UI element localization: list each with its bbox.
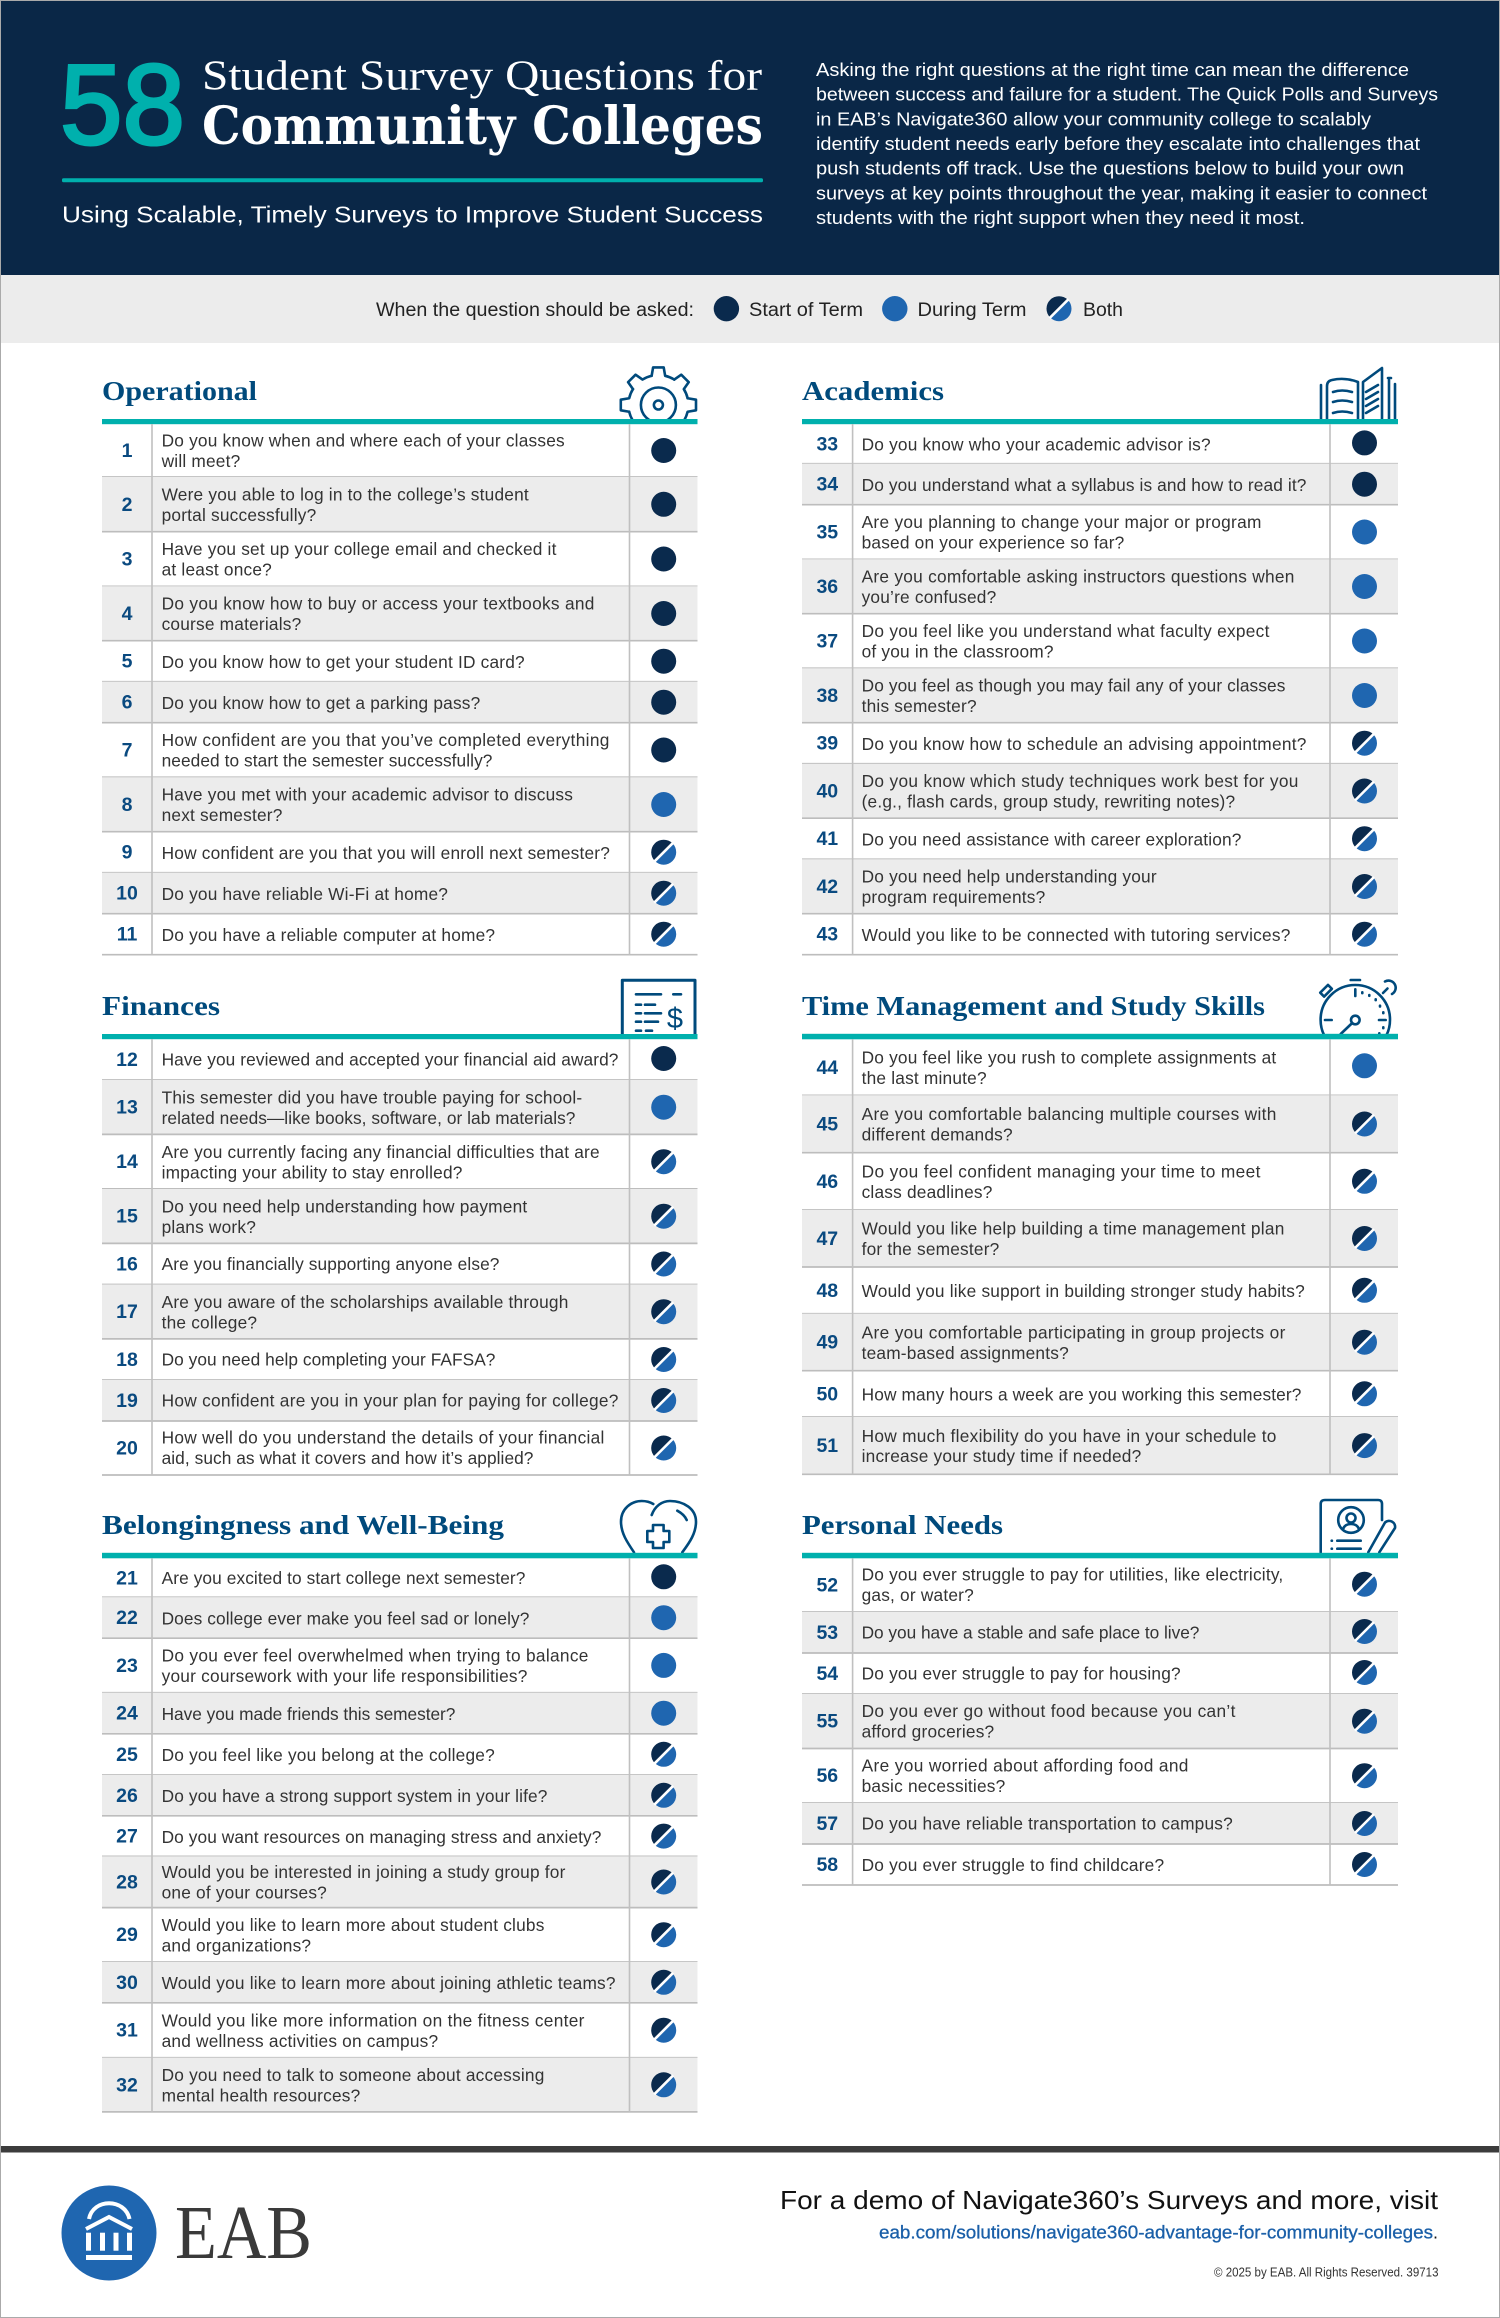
subtitle: Using Scalable, Timely Surveys to Improve Student Success [62, 202, 763, 228]
copyright: © 2025 by EAB. All Rights Reserved. 39713 [1214, 2265, 1438, 2280]
panel: personal needs [802, 1500, 1398, 1885]
row 18 [102, 1347, 698, 1380]
row 26: Do you have a strong support system in your life? [162, 1786, 548, 1806]
icon: open book [1321, 368, 1395, 419]
row 43: Would you like to be connected with tutoring services? [862, 925, 1291, 945]
row 7: How confident are you that you’ve completed everything [162, 730, 610, 750]
row 49: team-based assignments? [862, 1343, 1069, 1363]
row 47 [802, 1210, 1398, 1267]
row 40: (e.g., flash cards, group study, rewriting notes)? [862, 792, 1235, 812]
row 33: Do you know who your academic advisor is? [862, 435, 1211, 455]
row 3: at least once? [162, 560, 272, 580]
row 22: Does college ever make you feel sad or lonely? [162, 1608, 530, 1628]
row 50: 50 [816, 1383, 838, 1405]
intro paragraph: Asking the right questions at the right time can mean the difference [816, 59, 1409, 80]
row 35: based on your experience so far? [862, 533, 1125, 553]
legend band: When the question should be asked: [376, 300, 694, 321]
section rule [102, 1553, 698, 1558]
row 44: 44 [816, 1057, 838, 1079]
row 52: gas, or water? [862, 1585, 974, 1605]
row 42 [802, 859, 1398, 914]
legend band: During Term [918, 300, 1026, 321]
row 44 [802, 1048, 1398, 1095]
heading: personal needs: Personal Needs [802, 1510, 1003, 1540]
row 35: Are you planning to change your major or program [862, 512, 1262, 532]
row 43: 43 [816, 924, 838, 946]
row 54 [802, 1660, 1398, 1694]
row 23 [102, 1646, 698, 1693]
row 45: 45 [816, 1114, 838, 1136]
row 12: Have you reviewed and accepted your financial aid award? [162, 1050, 619, 1070]
panel: belongingness and well-being [102, 1501, 698, 2112]
row 5 [102, 649, 698, 682]
row 7 [102, 730, 698, 777]
row 33: 33 [816, 433, 838, 455]
row 21: 21 [116, 1567, 138, 1589]
heading: time management: Time Management and Study Skills [802, 991, 1265, 1021]
row 53: Do you have a stable and safe place to live? [862, 1622, 1200, 1642]
row 28: Would you be interested in joining a study group for [162, 1862, 566, 1882]
row 6: Do you know how to get a parking pass? [162, 693, 480, 713]
row 30: 30 [116, 1972, 138, 1994]
row 8: Have you met with your academic advisor to discuss [162, 785, 573, 805]
row 12 [102, 1046, 698, 1080]
panel: academics [802, 368, 1398, 955]
row 42: Do you need help understanding your [862, 867, 1157, 887]
row 28: one of your courses? [162, 1883, 327, 1903]
row 42: program requirements? [862, 887, 1045, 907]
row 14: 14 [116, 1151, 138, 1173]
row 46: class deadlines? [862, 1182, 993, 1202]
row 36: you’re confused? [862, 587, 996, 607]
row 3: Have you set up your college email and checked it [162, 539, 557, 559]
teal rule [62, 178, 763, 182]
row 32: mental health resources? [162, 2085, 360, 2105]
row 10: 10 [116, 883, 138, 905]
row 51: increase your study time if needed? [862, 1446, 1141, 1466]
big number 58: 58 [60, 42, 185, 169]
row 2 [102, 477, 698, 532]
row 9: How confident are you that you will enroll next semester? [162, 843, 610, 863]
row 18: 18 [116, 1349, 138, 1371]
row 45: Are you comfortable balancing multiple courses with [862, 1104, 1277, 1124]
row 55 [802, 1694, 1398, 1748]
intro paragraph: identify student needs early before they escalate into challenges that [816, 133, 1421, 154]
panel: time management [802, 980, 1398, 1474]
row 17: the college? [162, 1312, 257, 1332]
row 13: 13 [116, 1097, 138, 1119]
intro paragraph: surveys at key points throughout the year, making it easier to connect [816, 182, 1428, 203]
row 18: Do you need help completing your FAFSA? [162, 1350, 496, 1370]
footer: . [1433, 2222, 1438, 2242]
row 8: next semester? [162, 805, 283, 825]
legend band: Start of Term [749, 300, 863, 321]
row 29: 29 [116, 1924, 138, 1946]
row 15: 15 [116, 1206, 138, 1228]
row 57 [802, 1803, 1398, 1844]
row 21: Are you excited to start college next semester? [162, 1568, 526, 1588]
row 32: 32 [116, 2074, 138, 2096]
row 26: 26 [116, 1785, 138, 1807]
row 25: Do you feel like you belong at the college? [162, 1745, 495, 1765]
icon: stopwatch [1318, 978, 1397, 1034]
row 4: course materials? [162, 614, 301, 634]
row 46: Do you feel confident managing your time to meet [862, 1162, 1261, 1182]
row 29: Would you like to learn more about student clubs [162, 1915, 545, 1935]
row 1: Do you know when and where each of your classes [162, 431, 565, 451]
row 24: 24 [116, 1703, 138, 1725]
heading: belongingness: Belongingness and Well-Being [102, 1510, 505, 1540]
row 6 [102, 682, 698, 723]
row 40: 40 [816, 780, 838, 802]
row 32 [102, 2058, 698, 2112]
row 23: Do you ever feel overwhelmed when trying to balance [162, 1646, 589, 1666]
row 14: impacting your ability to stay enrolled? [162, 1162, 463, 1182]
intro paragraph [816, 59, 1438, 228]
row 34: Do you understand what a syllabus is and how to read it? [862, 475, 1307, 495]
row 26 [102, 1775, 698, 1816]
row 50: How many hours a week are you working this semester? [862, 1385, 1302, 1405]
row 56: 56 [816, 1765, 838, 1787]
row 5: 5 [122, 651, 133, 673]
row 20: How well do you understand the details of your financial [162, 1428, 605, 1448]
row 51: How much flexibility do you have in your schedule to [862, 1426, 1277, 1446]
row 6: 6 [122, 692, 133, 714]
row 10: Do you have reliable Wi-Fi at home? [162, 884, 448, 904]
row 9: 9 [122, 842, 133, 864]
row 32: Do you need to talk to someone about accessing [162, 2065, 545, 2085]
row 11 [102, 922, 698, 955]
row 7: needed to start the semester successfully? [162, 751, 493, 771]
row 42: 42 [816, 876, 838, 898]
row 51: 51 [816, 1435, 838, 1457]
row 20: 20 [116, 1438, 138, 1460]
row 22 [102, 1597, 698, 1638]
row 52: Do you ever struggle to pay for utilities, like electricity, [862, 1565, 1283, 1585]
row 1 [102, 431, 698, 477]
row 31: Would you like more information on the fitness center [162, 2010, 585, 2030]
row 34 [802, 464, 1398, 505]
row 14: Are you currently facing any financial difficulties that are [162, 1142, 600, 1162]
icon: financial document: $ [667, 1003, 683, 1035]
row 25: 25 [116, 1744, 138, 1766]
row 7: 7 [122, 740, 132, 762]
title line one: Student Survey Questions for [202, 54, 762, 100]
icon: profile document and pencil [1321, 1500, 1395, 1552]
row 58: 58 [816, 1854, 838, 1876]
row 29 [102, 1915, 698, 1962]
heading: academics: Academics [802, 376, 944, 406]
row 55: Do you ever go without food because you can’t [862, 1701, 1236, 1721]
row 37: of you in the classroom? [862, 642, 1054, 662]
row 30: Would you like to learn more about joining athletic teams? [162, 1973, 616, 1993]
row 16 [102, 1251, 698, 1284]
panel: finances [102, 980, 698, 1475]
row 1: will meet? [161, 451, 240, 471]
row 24: Have you made friends this semester? [162, 1704, 456, 1724]
row 49: 49 [816, 1332, 838, 1354]
row 17 [102, 1284, 698, 1339]
legend band [0, 275, 1500, 343]
row 1: 1 [122, 440, 133, 462]
row 19: How confident are you in your plan for paying for college? [162, 1390, 619, 1410]
url: eab.com/solutions/navigate360-advantage-for-community-colleges [879, 2222, 1433, 2242]
row 13 [102, 1080, 698, 1134]
section rule [802, 1034, 1398, 1039]
row 11: Do you have a reliable computer at home? [162, 925, 495, 945]
row 23: your coursework with your life responsibilities? [162, 1666, 528, 1686]
row 53 [802, 1612, 1398, 1653]
row 4: Do you know how to buy or access your textbooks and [162, 594, 595, 614]
row 23: 23 [116, 1655, 138, 1677]
section rule [802, 1553, 1398, 1558]
icon: EAB logo [62, 2186, 156, 2280]
row 52 [802, 1565, 1398, 1612]
intro paragraph: between success and failure for a student. The Quick Polls and Surveys [816, 84, 1438, 105]
heading: operational: Operational [102, 376, 258, 406]
row 51 [802, 1417, 1398, 1474]
row 13: This semester did you have trouble paying for school- [162, 1087, 582, 1107]
section rule [102, 419, 698, 424]
call to action: For a demo of Navigate360’s Surveys and more, visit [780, 2185, 1439, 2215]
intro paragraph: students with the right support when they need it most. [816, 207, 1305, 228]
title line two: Community Colleges [202, 96, 763, 157]
row 34: 34 [816, 474, 838, 496]
section rule [102, 1034, 698, 1039]
row 2: portal successfully? [162, 505, 316, 525]
row 13: related needs—like books, software, or lab materials? [162, 1108, 576, 1128]
row 3 [102, 539, 698, 586]
EAB wordmark: EAB [175, 2191, 312, 2275]
row 38: Do you feel as though you may fail any of your classes [862, 676, 1286, 696]
row 16: Are you financially supporting anyone else? [162, 1254, 500, 1274]
row 54: Do you ever struggle to pay for housing? [862, 1664, 1181, 1684]
row 29: and organizations? [162, 1935, 311, 1955]
row 41: 41 [816, 828, 838, 850]
row 40: Do you know which study techniques work best for you [862, 771, 1299, 791]
row 14 [102, 1142, 698, 1189]
row 41 [802, 826, 1398, 859]
row 15: Do you need help understanding how payment [162, 1196, 527, 1216]
row 57: 57 [816, 1813, 838, 1835]
section rule [802, 419, 1398, 424]
row 19 [102, 1380, 698, 1421]
row 21 [102, 1564, 698, 1597]
heading: finances: Finances [102, 991, 220, 1021]
header banner [0, 0, 1500, 275]
row 4 [102, 586, 698, 641]
row 38 [802, 668, 1398, 723]
row 35: 35 [816, 522, 838, 544]
row 16: 16 [116, 1254, 138, 1276]
row 56 [802, 1756, 1398, 1803]
footer [0, 2146, 1500, 2280]
row 57: Do you have reliable transportation to campus? [862, 1814, 1233, 1834]
row 30 [102, 1962, 698, 2003]
row 44: the last minute? [862, 1068, 987, 1088]
icon: heart with cross [621, 1501, 696, 1552]
row 54: 54 [816, 1663, 838, 1685]
row 56: basic necessities? [862, 1776, 1005, 1796]
row 36 [802, 559, 1398, 614]
row 10 [102, 873, 698, 914]
row 28: 28 [116, 1872, 138, 1894]
row 46 [802, 1162, 1398, 1210]
row 31 [102, 2010, 698, 2058]
row 9 [102, 840, 698, 873]
row 2: 2 [122, 494, 133, 516]
row 55: afford groceries? [862, 1722, 994, 1742]
row 20 [102, 1428, 698, 1475]
panel: operational [102, 367, 698, 955]
row 33 [802, 430, 1398, 464]
row 15: plans work? [162, 1217, 256, 1237]
row 49: Are you comfortable participating in group projects or [862, 1322, 1286, 1342]
row 41: Do you need assistance with career exploration? [862, 830, 1242, 850]
row 17: 17 [116, 1301, 138, 1323]
row 58 [802, 1852, 1398, 1885]
intro paragraph: in EAB’s Navigate360 allow your community college to scalably [816, 108, 1372, 129]
row 31: and wellness activities on campus? [162, 2031, 438, 2051]
row 40 [802, 764, 1398, 818]
row 38: this semester? [862, 696, 977, 716]
row 52: 52 [816, 1575, 838, 1597]
row 48: Would you like support in building stronger study habits? [862, 1281, 1305, 1301]
row 45 [802, 1095, 1398, 1153]
row 58: Do you ever struggle to find childcare? [862, 1855, 1164, 1875]
row 48: 48 [816, 1280, 838, 1302]
row 47: Would you like help building a time management plan [862, 1219, 1285, 1239]
row 8: 8 [122, 794, 133, 816]
row 43 [802, 922, 1398, 955]
row 39: Do you know how to schedule an advising appointment? [862, 734, 1307, 754]
row 31: 31 [116, 2020, 138, 2042]
row 47: 47 [816, 1228, 838, 1250]
row 53: 53 [816, 1622, 838, 1644]
row 37 [802, 621, 1398, 668]
row 47: for the semester? [862, 1239, 999, 1259]
row 39: 39 [816, 733, 838, 755]
row 49 [802, 1314, 1398, 1371]
intro paragraph: push students off track. Use the questions below to build your own [816, 158, 1404, 179]
row 27: 27 [116, 1826, 138, 1848]
row 56: Are you worried about affording food and [862, 1756, 1189, 1776]
row 28 [102, 1856, 698, 1908]
row 2: Were you able to log in to the college’s student [162, 484, 529, 504]
row 38: 38 [816, 685, 838, 707]
row 20: aid, such as what it covers and how it’s applied? [162, 1448, 534, 1468]
row 11: 11 [117, 924, 137, 946]
row 55: 55 [816, 1711, 838, 1733]
legend band: Both [1083, 300, 1123, 321]
row 3: 3 [122, 548, 133, 570]
row 48 [802, 1278, 1398, 1314]
row 37: 37 [816, 630, 838, 652]
row 8 [102, 777, 698, 832]
row 22: 22 [116, 1607, 138, 1629]
row 46: 46 [816, 1171, 838, 1193]
row 5: Do you know how to get your student ID card? [162, 652, 525, 672]
row 35 [802, 512, 1398, 559]
row 19: 19 [116, 1390, 138, 1412]
row 24 [102, 1693, 698, 1734]
row 36: 36 [816, 576, 838, 598]
row 15 [102, 1189, 698, 1243]
row 36: Are you comfortable asking instructors questions when [862, 567, 1295, 587]
row 25 [102, 1742, 698, 1775]
row 50 [802, 1381, 1398, 1417]
icon: gear [620, 366, 698, 419]
row 27 [102, 1824, 698, 1856]
row 17: Are you aware of the scholarships available through [162, 1292, 569, 1312]
row 39 [802, 731, 1398, 764]
icon: financial document [622, 980, 695, 1035]
row 27: Do you want resources on managing stress and anxiety? [162, 1827, 602, 1847]
row 45: different demands? [862, 1125, 1013, 1145]
row 44: Do you feel like you rush to complete assignments at [862, 1048, 1276, 1068]
row 12: 12 [116, 1049, 138, 1071]
row 4: 4 [122, 603, 133, 625]
row 37: Do you feel like you understand what faculty expect [862, 621, 1270, 641]
